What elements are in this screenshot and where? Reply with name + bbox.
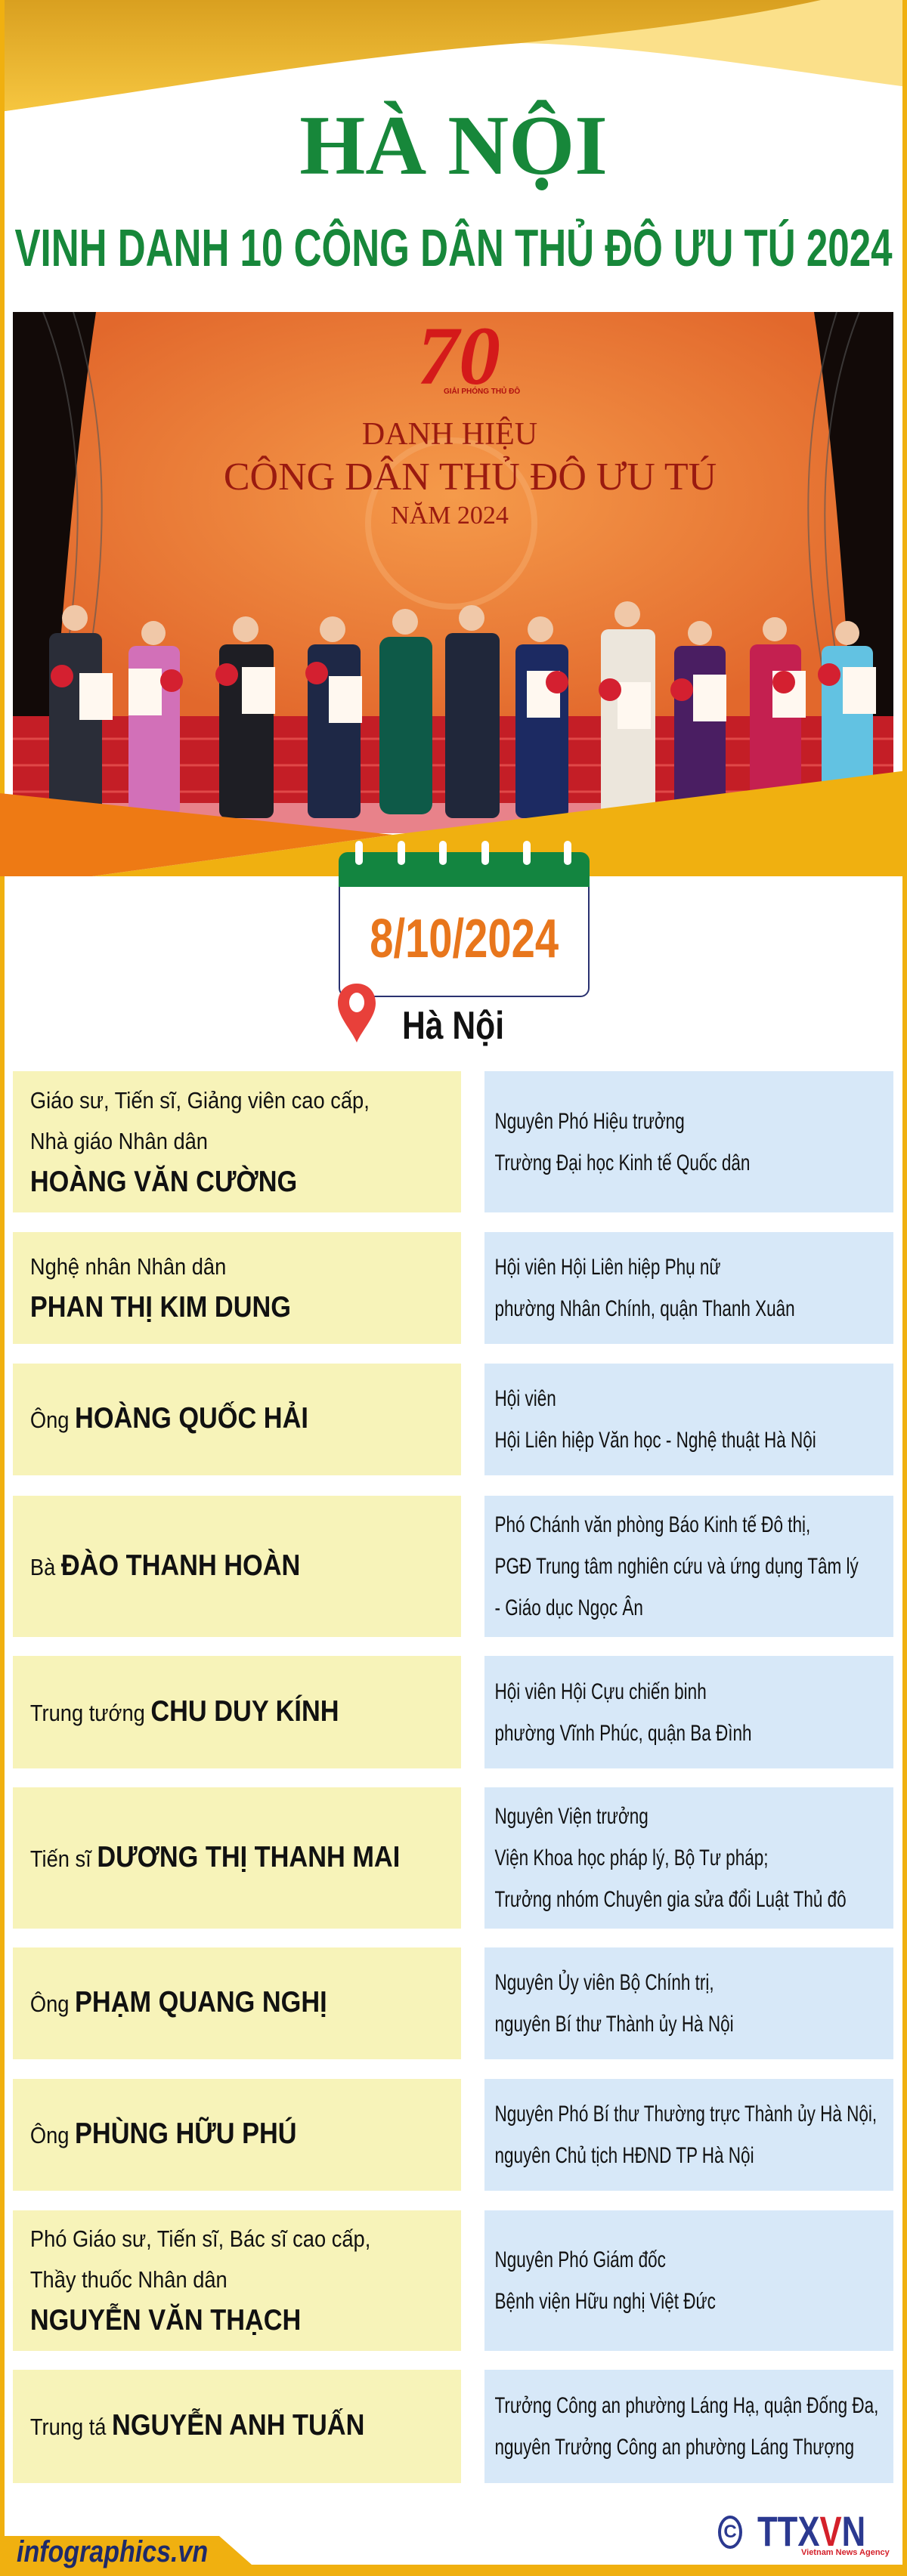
text: nguyên Bí thư Thành ủy Hà Nội — [494, 2012, 734, 2037]
band: orange and yellow diagonal — [0, 771, 902, 876]
text: phường Nhân Chính, quận Thanh Xuân — [494, 1296, 795, 1321]
text: Nguyên Phó Giám đốc — [494, 2247, 666, 2272]
text: Trường Đại học Kinh tế Quốc dân — [494, 1150, 750, 1175]
text: phường Vĩnh Phúc, quận Ba Đình — [494, 1721, 752, 1745]
row 2 — [13, 1232, 461, 1344]
calendar: date — [339, 841, 590, 997]
top decorative swoosh — [5, 0, 902, 112]
row 3 — [13, 1364, 461, 1475]
text: PGĐ Trung tâm nghiên cứu và ứng dụng Tâm lý — [494, 1554, 859, 1579]
row 1: HOÀNG VĂN CƯỜNG — [30, 1165, 297, 1198]
text: Phó Chánh văn phòng Báo Kinh tế Đô thị, — [494, 1512, 810, 1537]
logo: TTXVN: TTXVN — [757, 2507, 865, 2555]
date text: 8/10/2024 — [370, 909, 559, 969]
backdrop text — [224, 416, 717, 530]
row 4 — [13, 1496, 461, 1637]
text: Nguyên Phó Hiệu trưởng — [494, 1109, 685, 1133]
subtitle: VINH DANH 10 CÔNG DÂN THỦ ĐÔ ƯU TÚ 2024 — [14, 218, 893, 277]
people — [49, 601, 876, 818]
text: Nguyên Ủy viên Bộ Chính trị, — [494, 1970, 714, 1995]
text: nguyên Trưởng Công an phường Láng Thượng — [494, 2435, 854, 2460]
row 8 — [13, 2079, 461, 2191]
row 6 — [13, 1787, 461, 1929]
text: Hội viên Hội Liên hiệp Phụ nữ — [494, 1255, 721, 1280]
row 7: Ông PHẠM QUANG NGHỊ — [30, 1986, 327, 2018]
logo: TTXVN: Vietnam News Agency — [801, 2548, 890, 2557]
row 7 — [13, 1947, 461, 2059]
title: HÀ NỘI — [299, 99, 608, 193]
text: nguyên Chủ tịch HĐND TP Hà Nội — [494, 2143, 754, 2168]
row 1: Giáo sư, Tiến sĩ, Giảng viên cao cấp, — [30, 1086, 370, 1113]
row 4: Bà ĐÀO THANH HOÀN — [30, 1549, 300, 1582]
text: Nguyên Viện trưởng — [494, 1804, 649, 1829]
calendar header — [339, 852, 590, 887]
row 3: Ông HOÀNG QUỐC HẢI — [30, 1402, 308, 1435]
logo: TTXVN: C — [723, 2522, 737, 2542]
text: Bệnh viện Hữu nghị Việt Đức — [494, 2289, 716, 2314]
text: - Giáo dục Ngọc Ân — [494, 1595, 643, 1620]
row 2: Nghệ nhân Nhân dân — [30, 1253, 226, 1280]
calendar rings — [355, 841, 571, 865]
footer bar — [5, 2536, 902, 2576]
curtains — [43, 312, 859, 705]
logo: TTXVN — [718, 2507, 890, 2557]
text: Nguyên Phó Bí thư Thường trực Thành ủy Hà Nội, — [494, 2102, 877, 2127]
row 9: NGUYỄN VĂN THẠCH — [30, 2304, 301, 2337]
row 1: Nhà giáo Nhân dân — [30, 1127, 208, 1154]
backdrop text: CÔNG DÂN THỦ ĐÔ ƯU TÚ — [224, 455, 717, 499]
backdrop text: DANH HIỆU — [362, 416, 537, 452]
text: Hội Liên hiệp Văn học - Nghệ thuật Hà Nội — [494, 1428, 816, 1453]
text: Hội viên Hội Cựu chiến binh — [494, 1679, 707, 1704]
row 9: Phó Giáo sư, Tiến sĩ, Bác sĩ cao cấp, — [30, 2225, 370, 2252]
text: Trưởng nhóm Chuyên gia sửa đổi Luật Thủ đô — [494, 1887, 847, 1912]
text: Trưởng Công an phường Láng Hạ, quận Đống Đa, — [494, 2393, 878, 2418]
row 10 — [13, 2370, 461, 2483]
row 10: Trung tá NGUYỄN ANH TUẤN — [30, 2409, 364, 2442]
backdrop text: NĂM 2024 — [391, 502, 509, 530]
row 1 — [13, 1071, 461, 1212]
frame borders — [0, 0, 5, 2576]
row 8: Ông PHÙNG HỮU PHÚ — [30, 2117, 297, 2150]
row 2: PHAN THỊ KIM DUNG — [30, 1291, 291, 1324]
row 9: Thầy thuốc Nhân dân — [30, 2266, 228, 2293]
photo: award ceremony — [13, 312, 893, 833]
location text: Hà Nội — [402, 1004, 504, 1048]
logo 70: 70 — [417, 312, 500, 402]
logo 70: GIẢI PHÓNG THỦ ĐÔ — [444, 386, 520, 396]
text: Viện Khoa học pháp lý, Bộ Tư pháp; — [494, 1846, 768, 1870]
row 5 — [13, 1656, 461, 1768]
footer: infographics.vn: infographics.vn — [17, 2535, 208, 2568]
row 5: Trung tướng CHU DUY KÍNH — [30, 1695, 339, 1727]
row 9 — [13, 2210, 461, 2351]
row 6: Tiến sĩ DƯƠNG THỊ THANH MAI — [30, 1840, 400, 1873]
text: Hội viên — [494, 1386, 556, 1411]
icon: location pin — [338, 984, 376, 1042]
stage — [13, 716, 893, 833]
